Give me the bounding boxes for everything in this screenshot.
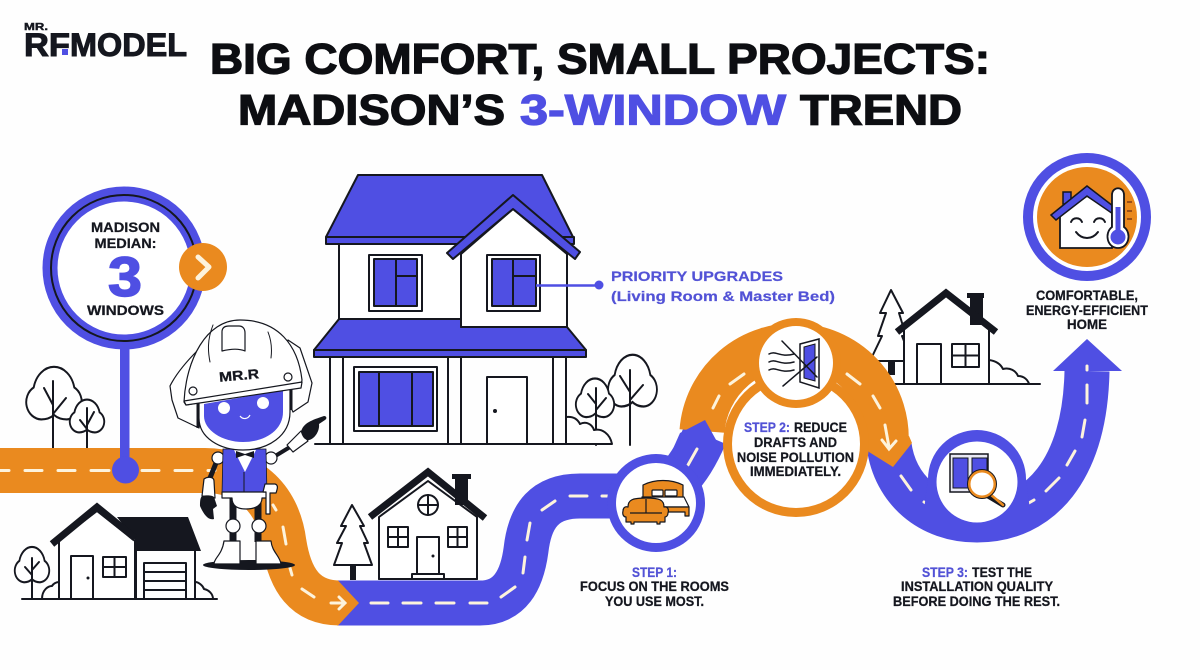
- road: blue third segment with arrow: [889, 339, 1122, 520]
- callout: priority upgrades: (Living Room & Master Bed): [611, 288, 835, 304]
- house: right on hill: [870, 290, 1040, 384]
- torso and vest: [212, 452, 224, 464]
- title: BIG COMFORT, SMALL PROJECTS:: [210, 36, 990, 84]
- text: step 2: REDUCE: [794, 420, 847, 435]
- gable: [461, 209, 567, 327]
- title: 3-WINDOW: [520, 86, 786, 134]
- main house: [314, 175, 586, 444]
- legs: [233, 495, 258, 542]
- mascot: Mr. R robot: MR.R: [218, 366, 260, 385]
- text: step 1: [580, 565, 729, 609]
- text: step 1: STEP 1:: [632, 565, 677, 580]
- right arm: [272, 447, 290, 458]
- ear muffs: [170, 350, 205, 428]
- upper roof: [326, 175, 573, 237]
- text: step 3: BEFORE DOING THE REST.: [893, 594, 1060, 609]
- step 2 marker: [723, 318, 869, 517]
- icon: draft blocked at window: [769, 339, 819, 388]
- text: step 3: INSTALLATION QUALITY: [901, 579, 1053, 594]
- belt and hammer: [222, 492, 267, 509]
- upper left window: [369, 255, 422, 311]
- title: [210, 36, 990, 134]
- trees: right of main house: [566, 355, 657, 445]
- title: MADISON’S: [238, 86, 505, 134]
- text: step 2: NOISE POLLUTION: [737, 450, 854, 465]
- boots: [214, 541, 240, 564]
- logo: Mr. Remodel: MODEL: [70, 27, 187, 63]
- text: step 2: IMMEDIATELY.: [750, 464, 841, 479]
- pin stem and ball: [120, 345, 130, 470]
- door: [487, 377, 527, 444]
- text: step 2: STEP 2:: [744, 420, 790, 435]
- logo: Mr. Remodel: MR.: [24, 21, 48, 33]
- text: step 3: TEST THE: [972, 565, 1032, 580]
- head: [199, 385, 290, 450]
- callout: Madison median: MEDIAN:: [94, 236, 156, 251]
- callout: priority upgrades: [536, 268, 835, 304]
- text: comfortable home label: HOME: [1067, 317, 1107, 332]
- step 3 marker: [924, 430, 1030, 522]
- house: left with garage: [15, 507, 217, 599]
- upper wall: [339, 244, 567, 324]
- callout: Madison median: WINDOWS: [87, 303, 164, 318]
- left arm: [208, 458, 218, 483]
- icon: window under magnifier: [950, 454, 1003, 505]
- text: step 3: STEP 3:: [922, 565, 968, 580]
- lower wall: [315, 357, 566, 444]
- road: orange first segment: [0, 470, 340, 603]
- text: step 1: YOU USE MOST.: [605, 594, 704, 609]
- orange arrow badge: [179, 243, 227, 291]
- text: comfortable home label: ENERGY-EFFICIENT: [1026, 303, 1149, 318]
- text: comfortable home label: COMFORTABLE,: [1036, 288, 1138, 303]
- goal badge: comfortable home: [1028, 158, 1146, 276]
- step 1 marker: [607, 454, 705, 552]
- callout: Madison median: 3: [108, 245, 142, 308]
- shadow: [203, 560, 295, 570]
- title: TREND: [800, 86, 962, 134]
- lower roof: [314, 319, 586, 350]
- helmet: [184, 320, 302, 405]
- thermometer: [1107, 188, 1129, 248]
- house: middle with pine tree: [334, 472, 485, 580]
- trees: left of road: [26, 367, 104, 448]
- logo: Mr. Remodel: RF: [24, 27, 70, 63]
- callout: Madison median: [50, 194, 227, 484]
- road: blue joint before arch: [668, 420, 720, 480]
- road: blue second segment: [337, 435, 705, 626]
- mascot: Mr. R robot: [170, 320, 326, 570]
- logo: Mr. Remodel: [24, 21, 187, 63]
- text: step 2: DRAFTS AND: [754, 435, 837, 450]
- upper right window: [487, 255, 540, 311]
- road: orange arch segment: [702, 346, 912, 467]
- lower window: [354, 367, 437, 431]
- text: step 1: FOCUS ON THE ROOMS: [580, 579, 729, 594]
- callout: priority upgrades: PRIORITY UPGRADES: [611, 268, 783, 284]
- text: step 2: [737, 420, 854, 479]
- road dashes: [0, 366, 1087, 609]
- icon: bed and sofa: [623, 480, 689, 524]
- callout: Madison median: MADISON: [91, 220, 160, 235]
- text: comfortable home label: [1026, 288, 1149, 332]
- text: step 3: [893, 565, 1060, 609]
